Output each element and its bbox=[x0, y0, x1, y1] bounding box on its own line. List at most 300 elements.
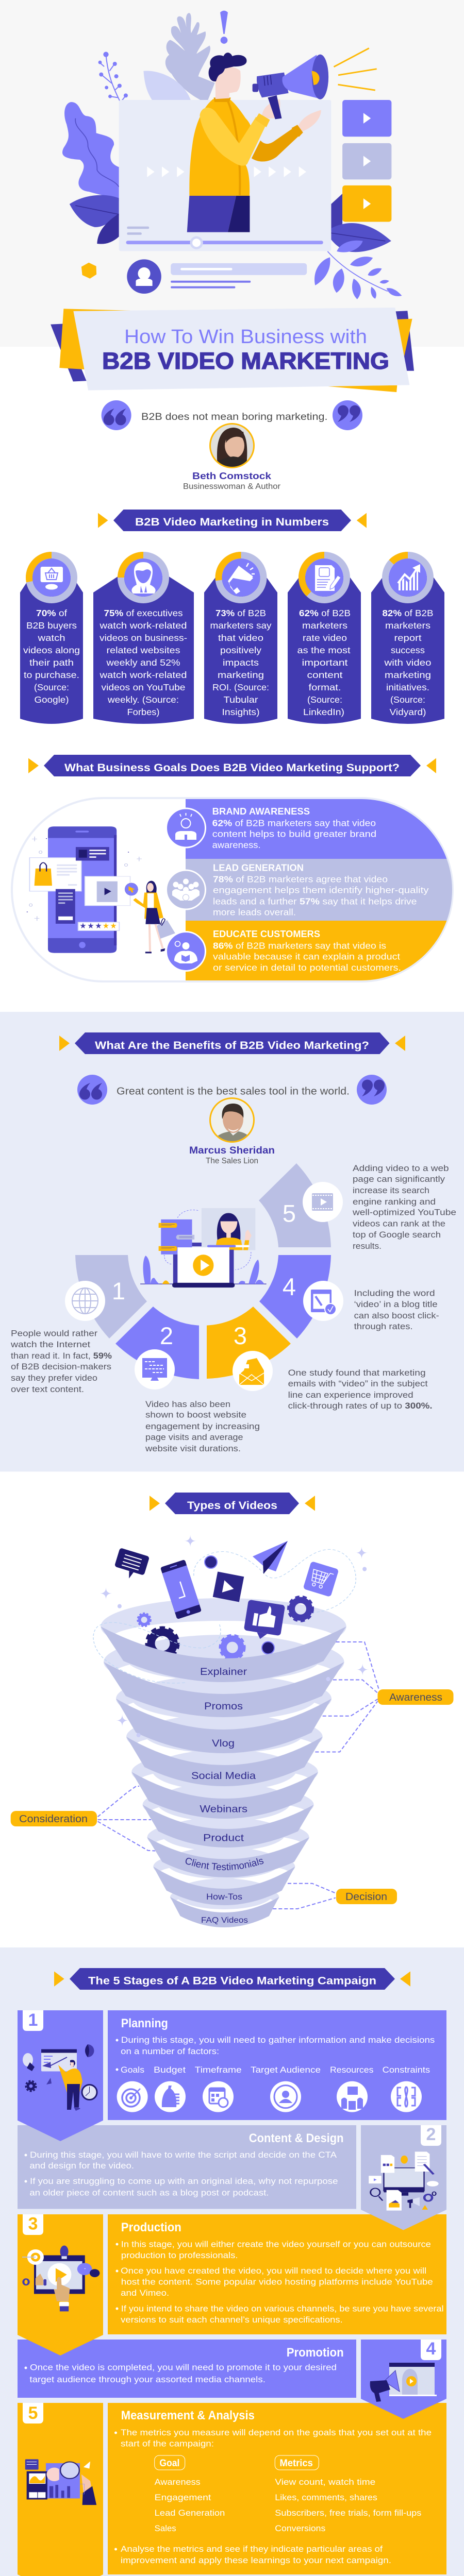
stage 5 boxes bbox=[18, 2403, 446, 2576]
icon: basket monitor bbox=[41, 567, 63, 589]
name: Beth Comstock bbox=[192, 470, 272, 481]
lead generation text bbox=[213, 862, 429, 917]
stage 4 boxes bbox=[18, 2340, 446, 2419]
stage 1 boxes bbox=[18, 2010, 446, 2141]
funnel floating icons bbox=[112, 1541, 339, 1642]
icon: phone bbox=[160, 1560, 202, 1619]
benefit text 3: line can experience improved bbox=[288, 1390, 413, 1400]
segment 2: 2 bbox=[160, 1322, 173, 1349]
stage 3 illustration bbox=[22, 2246, 100, 2311]
layer: Webinars bbox=[131, 1751, 318, 1822]
stat text: ROI. (Source: bbox=[212, 682, 269, 692]
stage 5 illustration bbox=[25, 2459, 96, 2505]
stage 2 bullets: an older piece of content such as a blog post or podcast. bbox=[29, 2188, 269, 2197]
layer: Webinars: Webinars bbox=[200, 1804, 247, 1815]
segment 5: 5 bbox=[283, 1199, 296, 1227]
number tab 4 bbox=[421, 2339, 441, 2360]
goal metric table: Sales bbox=[155, 2524, 176, 2533]
stage 1 bullets: Timeframe bbox=[195, 2065, 242, 2075]
segment 5 bbox=[259, 1163, 331, 1247]
benefit text 3: emails with “video” in the subject bbox=[288, 1379, 428, 1388]
stat text bbox=[210, 608, 272, 717]
stat text: Insights) bbox=[222, 707, 260, 717]
heading: business goals bbox=[28, 755, 436, 776]
stat text: Forbes) bbox=[127, 707, 160, 717]
heading: types of videos: Types of Videos bbox=[187, 1500, 277, 1512]
heading: business goals: What Business Goals Does B2B Video Marketing Support? bbox=[64, 762, 400, 774]
stat text: 82% of B2B bbox=[383, 608, 433, 618]
stage 4 illustration bbox=[370, 2363, 437, 2402]
stat text: videos along bbox=[23, 645, 80, 655]
number tab 3: 3 bbox=[28, 2214, 38, 2234]
stat text: initiatives. bbox=[386, 682, 429, 692]
stage 4 text bbox=[25, 2363, 337, 2384]
stat text: marketers bbox=[302, 620, 347, 631]
title line 2: B2B VIDEO MARKETING bbox=[102, 348, 389, 374]
educate customers text: valuable because it can explain a product bbox=[213, 952, 400, 962]
header background bbox=[0, 0, 464, 347]
panel: business goals bbox=[12, 798, 454, 981]
stage 1 bullets: Budget bbox=[154, 2065, 186, 2075]
segment 4: 4 bbox=[283, 1273, 296, 1300]
icon: play tile bbox=[213, 1571, 244, 1602]
stat column 3 bbox=[204, 555, 277, 724]
plant: feather leaf bbox=[165, 13, 215, 102]
benefit text 1: of B2B decision-makers bbox=[11, 1362, 111, 1371]
stat text: B2B buyers bbox=[26, 620, 77, 631]
stat text: weekly. (Source: bbox=[107, 694, 179, 705]
stat text: with video bbox=[384, 657, 431, 668]
stat text: watch work-related bbox=[99, 620, 187, 631]
stat text: weekly and 52% bbox=[106, 657, 180, 668]
stat text: marketers say bbox=[210, 620, 272, 631]
stage 2 title: Content & Design bbox=[249, 2131, 343, 2145]
video panel bbox=[119, 100, 331, 251]
label: consideration: Consideration bbox=[19, 1814, 88, 1825]
icon: businessman bbox=[131, 562, 156, 594]
heading: benefits bbox=[59, 1032, 405, 1054]
benefit text 1: than read it. In fact, 59% bbox=[11, 1351, 112, 1361]
rating stars: ★ bbox=[95, 922, 102, 930]
heading: campaign stages bbox=[54, 1968, 410, 1990]
sprig with leaves bbox=[314, 251, 402, 299]
benefit text 5: page can significantly bbox=[353, 1174, 445, 1184]
stat column 5 bbox=[371, 555, 444, 724]
icon: goals bbox=[117, 2081, 148, 2112]
metrics pill: Metrics bbox=[279, 2458, 313, 2469]
layer: Explainer bbox=[101, 1598, 346, 1682]
quote marks right bbox=[357, 1075, 387, 1105]
stage 4 title: Promotion bbox=[287, 2346, 344, 2360]
stat text: Tubular bbox=[224, 694, 258, 705]
stat text: important bbox=[302, 657, 348, 668]
funnel bbox=[101, 1598, 346, 1927]
layer: Social Media: Social Media bbox=[191, 1771, 256, 1782]
plant: twig bbox=[98, 52, 128, 101]
benefit text 5: videos can rank at the bbox=[353, 1219, 445, 1229]
panel: benefits bbox=[0, 1012, 464, 1471]
icon: budget bbox=[155, 2081, 186, 2112]
benefit text 4: can also boost click- bbox=[354, 1311, 439, 1320]
portrait: Marcus Sheridan bbox=[209, 1097, 255, 1144]
benefit text 5: Adding video to a web bbox=[353, 1163, 449, 1173]
stat text: that video bbox=[218, 633, 263, 643]
stage 5 bbox=[18, 2403, 446, 2576]
brand awareness text: BRAND AWARENESS bbox=[212, 806, 310, 817]
layer: Explainer: Explainer bbox=[200, 1667, 247, 1677]
stat text: (Source: bbox=[390, 694, 425, 705]
icon: resources bbox=[337, 2081, 368, 2112]
stat text: positively bbox=[220, 645, 261, 655]
segment 3 bbox=[207, 1307, 291, 1379]
brand awareness text: content helps to build greater brand bbox=[212, 829, 376, 839]
stage 1 bullets: Goals bbox=[121, 2065, 144, 2075]
stage 1 illustration bbox=[23, 2044, 97, 2111]
stage 3 bullets bbox=[115, 2240, 443, 2325]
educate customers text: EDUCATE CUSTOMERS bbox=[213, 929, 320, 939]
stage 5 closing: Analyse the metrics and see if they indicate particular areas of bbox=[121, 2545, 383, 2554]
stage 2 bullets: and design for the video. bbox=[29, 2161, 134, 2171]
number tab 2: 2 bbox=[426, 2125, 436, 2144]
panel: campaign stages bbox=[0, 1947, 464, 2576]
stat text: as the most bbox=[297, 645, 351, 655]
lead generation text: 78% of B2B marketers agree that video bbox=[213, 874, 388, 885]
video thumbnails bbox=[342, 100, 391, 222]
portrait: Beth Comstock bbox=[209, 423, 255, 469]
layer: Product: Product bbox=[203, 1833, 244, 1843]
stage 2 bbox=[18, 2125, 446, 2230]
benefit text 2: shown to boost website bbox=[145, 1410, 246, 1420]
goal metric table bbox=[155, 2455, 421, 2533]
stat text bbox=[23, 608, 80, 705]
benefit text 4: ‘video’ in a blog title bbox=[354, 1299, 438, 1309]
layer: Social Media bbox=[126, 1714, 323, 1791]
layer: Promos bbox=[104, 1634, 344, 1720]
icon: cart tile bbox=[303, 1561, 339, 1597]
benefit text 2: page visits and average bbox=[145, 1432, 243, 1442]
benefit text 1: over text content. bbox=[11, 1384, 84, 1394]
dot bbox=[262, 1641, 274, 1654]
goal metric table: Conversions bbox=[275, 2524, 325, 2533]
stage 4 bbox=[18, 2339, 446, 2419]
benefit text 3 bbox=[288, 1368, 433, 1411]
educate customers text: 86% of B2B marketers say that video is bbox=[213, 941, 386, 951]
stat text: marketers bbox=[385, 620, 430, 631]
stage 3 title: Production bbox=[121, 2221, 181, 2234]
stage 3 boxes bbox=[18, 2214, 446, 2355]
stat text bbox=[383, 608, 433, 717]
icon: target audience bbox=[270, 2081, 301, 2112]
stage 1 bbox=[18, 2010, 446, 2141]
number tab 2 bbox=[421, 2125, 441, 2146]
stage 5 closing: improvement and apply these learnings to your next campaign. bbox=[121, 2556, 391, 2565]
brand awareness text bbox=[212, 806, 376, 850]
segment 2 bbox=[115, 1307, 199, 1379]
stage 4 text: target audience through your assorted media channels. bbox=[29, 2375, 266, 2384]
heading: numbers: B2B Video Marketing in Numbers bbox=[135, 516, 329, 528]
icon: chat bubble bbox=[112, 1548, 150, 1582]
stat text: content bbox=[307, 670, 343, 680]
label: decision bbox=[336, 1889, 397, 1904]
stat column 2 bbox=[93, 555, 194, 724]
heading: benefits: What Are the Benefits of B2B Video Marketing? bbox=[95, 1040, 369, 1052]
stage 5 closing bbox=[114, 2545, 391, 2565]
icon: growth chart bbox=[398, 564, 420, 590]
layer: FAQ Videos bbox=[170, 1885, 279, 1927]
educate customers text: or service in detail to potential customers. bbox=[213, 962, 401, 973]
lead generation text: engagement helps them identify higher-quality bbox=[213, 885, 429, 895]
brand awareness text: 62% of B2B marketers say that video bbox=[212, 818, 376, 828]
stat text: related websites bbox=[106, 645, 180, 655]
icon: educate customers bbox=[166, 931, 205, 971]
goal pill bbox=[155, 2455, 185, 2470]
gear: purple center bbox=[221, 1636, 244, 1659]
icon: document and pencil bbox=[315, 565, 341, 591]
metrics pill bbox=[275, 2455, 319, 2470]
stage 5 title: Measurement & Analysis bbox=[121, 2409, 255, 2422]
gear: dark right bbox=[289, 1597, 312, 1621]
stat text bbox=[99, 608, 187, 717]
person with megaphone bbox=[187, 53, 321, 232]
stat text: to purchase. bbox=[24, 670, 79, 680]
segment 1 bbox=[75, 1255, 147, 1338]
layer: Product bbox=[143, 1785, 314, 1851]
profile row bbox=[127, 259, 307, 294]
stage 3 bullets: and Vimeo. bbox=[121, 2289, 169, 2298]
stage 2 bullets: If you are struggling to come up with an original idea, why not repurpose bbox=[30, 2177, 338, 2186]
title line 1: How To Win Business with bbox=[124, 326, 367, 348]
stat text: watch bbox=[37, 633, 65, 643]
stat text: watch work-related bbox=[99, 670, 187, 680]
layer: Promos: Promos bbox=[204, 1701, 243, 1712]
stage 2 bullets: During this stage, you will have to write the script and decide on the CTA bbox=[30, 2150, 337, 2160]
benefit text 5 bbox=[352, 1163, 456, 1251]
banner backing shapes bbox=[51, 308, 414, 392]
stat text: Vidyard) bbox=[390, 707, 426, 717]
benefit text 3: click-through rates of up to 300%. bbox=[288, 1401, 433, 1411]
stage 3 bullets: Once you have created the video, you will need to decide where you will bbox=[121, 2266, 426, 2276]
goal metric table: View count, watch time bbox=[275, 2478, 375, 2487]
stage 1 bullets: Target Audience bbox=[251, 2065, 321, 2075]
stat text: format. bbox=[308, 682, 341, 692]
icon: video film bbox=[303, 1182, 343, 1222]
central illustration: laptop and presenter bbox=[140, 1208, 267, 1287]
name: Marcus Sheridan bbox=[189, 1145, 275, 1156]
quote text: B2B does not mean boring marketing. bbox=[141, 412, 328, 422]
quote: Beth Comstock bbox=[102, 400, 362, 491]
benefit text 1: People would rather bbox=[11, 1329, 97, 1338]
heading: numbers bbox=[98, 510, 367, 531]
segment 3: 3 bbox=[234, 1322, 247, 1349]
stage 3 bullets: In this stage, you will either create the video yourself or you can outsource bbox=[121, 2240, 431, 2249]
benefit text 3: One study found that marketing bbox=[288, 1368, 426, 1378]
benefit text 2: engagement by increasing bbox=[145, 1421, 260, 1431]
rating stars: ★ bbox=[103, 922, 109, 930]
progress slider bbox=[126, 227, 323, 249]
stat text: impacts bbox=[223, 657, 259, 668]
stat text: videos on YouTube bbox=[101, 682, 186, 692]
rating stars: ★ bbox=[110, 922, 117, 930]
icon: monitor code bbox=[135, 1349, 175, 1389]
stage 1 bullets: Constraints bbox=[383, 2065, 430, 2075]
stage 4 text: Once the video is completed, you will need to promote it to your desired bbox=[30, 2363, 337, 2372]
left leaves bbox=[62, 102, 119, 244]
stage 2 illustration bbox=[369, 2151, 439, 2211]
stage 1 bullets: Resources bbox=[330, 2065, 373, 2075]
stat text bbox=[297, 608, 351, 717]
role: The Sales Lion bbox=[206, 1157, 258, 1165]
stage 3 bbox=[18, 2214, 446, 2355]
label: consideration bbox=[11, 1811, 97, 1826]
stage 3 bullets: host the content. Some popular video hosting platforms include YouTube bbox=[121, 2278, 433, 2287]
icon: paper plane bbox=[253, 1541, 288, 1574]
layer: Client Testimonials: Client Testimonials bbox=[186, 1858, 264, 1870]
ring bbox=[302, 555, 346, 600]
stage 5 intro: The metrics you measure will depend on the goals that you set out at the bbox=[121, 2428, 432, 2437]
stage 5 intro bbox=[114, 2428, 432, 2449]
ring bbox=[386, 555, 430, 600]
layer: Vlog bbox=[116, 1674, 332, 1753]
stage 2 bullets bbox=[25, 2150, 338, 2197]
quote marks left bbox=[77, 1075, 107, 1105]
benefit text 5: well-optimized YouTube bbox=[352, 1208, 456, 1217]
ring bbox=[121, 555, 166, 600]
stat text: LinkedIn) bbox=[303, 707, 344, 717]
stat text: report bbox=[394, 633, 422, 643]
benefit text 5: top of Google search bbox=[353, 1230, 441, 1240]
layer: FAQ Videos: FAQ Videos bbox=[201, 1916, 248, 1925]
benefit text 2: website visit durations. bbox=[145, 1444, 241, 1453]
stat text: 70% of bbox=[36, 608, 67, 618]
stat text: marketing bbox=[385, 670, 431, 680]
colored bands bbox=[186, 799, 454, 980]
benefit text 1 bbox=[10, 1329, 112, 1394]
stat text: (Source: bbox=[307, 694, 342, 705]
goal metric table: Awareness bbox=[155, 2478, 201, 2487]
layer: How-Tos: How-Tos bbox=[206, 1892, 242, 1902]
number tab 4: 4 bbox=[426, 2339, 436, 2359]
benefit text 5: increase its search bbox=[353, 1185, 429, 1195]
stat text: videos on business- bbox=[100, 633, 187, 643]
number tab 1: 1 bbox=[28, 2010, 38, 2030]
stage 2 boxes bbox=[18, 2125, 446, 2230]
gear: dark left bbox=[147, 1628, 178, 1659]
stage 1 bullets: on a number of factors: bbox=[121, 2047, 219, 2056]
stage 3 bullets: production to professionals. bbox=[121, 2251, 238, 2260]
segment 4 bbox=[259, 1255, 331, 1338]
goal metric table: Lead Generation bbox=[155, 2509, 225, 2518]
stage 3 bullets: versions to suit each channel’s unique specifications. bbox=[121, 2315, 343, 2325]
right leaves bbox=[331, 194, 391, 252]
label: decision: Decision bbox=[345, 1891, 387, 1903]
icon: lead generation bbox=[166, 870, 205, 909]
rating stars: ★ bbox=[87, 922, 94, 930]
stage 1 bullets: During this stage, you will need to gather information and make decisions bbox=[121, 2036, 435, 2045]
heading: campaign stages: The 5 Stages of A B2B Video Marketing Campaign bbox=[88, 1975, 376, 1987]
dashed flight paths bbox=[93, 1549, 356, 1683]
number tab 1 bbox=[23, 2010, 43, 2031]
stat text: their path bbox=[29, 657, 74, 668]
icon: browser with check bbox=[303, 1281, 343, 1321]
icon: thumbs up bbox=[243, 1600, 285, 1642]
stat column 4 bbox=[288, 555, 361, 724]
goal metric table: Subscribers, free trials, form fill-ups bbox=[275, 2509, 421, 2518]
pill outline bbox=[12, 798, 453, 981]
icon: constraints bbox=[391, 2081, 422, 2112]
stage 1 bullets bbox=[115, 2036, 435, 2075]
benefit text 5: engine ranking and bbox=[353, 1197, 436, 1207]
goal metric table: Likes, comments, shares bbox=[275, 2493, 377, 2502]
benefit text 4: through rates. bbox=[354, 1321, 413, 1331]
gear: small bbox=[138, 1614, 151, 1626]
number tab 5 bbox=[23, 2403, 43, 2424]
number tab 3 bbox=[23, 2214, 43, 2235]
stat text: Google) bbox=[34, 694, 69, 705]
rating stars bbox=[79, 922, 117, 930]
benefit text 1: watch the Internet bbox=[10, 1340, 90, 1349]
layer: Vlog: Vlog bbox=[212, 1738, 235, 1749]
quote text: Great content is the best sales tool in the world. bbox=[117, 1086, 350, 1097]
ring bbox=[219, 555, 263, 600]
educate customers text bbox=[213, 929, 401, 973]
benefit text 4: Including the word bbox=[354, 1289, 435, 1298]
funnel stage lines bbox=[98, 1642, 379, 1909]
brand awareness text: awareness. bbox=[212, 840, 261, 850]
lead generation text: leads and a further 57% say that it helps drive bbox=[213, 896, 417, 906]
goal metric table: Engagement bbox=[155, 2493, 211, 2502]
icon: email megaphone bbox=[233, 1351, 273, 1391]
play arrows bbox=[147, 166, 306, 177]
exclamation mark bbox=[220, 11, 228, 44]
sparkles and dots bbox=[100, 1535, 369, 1737]
layer: How-Tos bbox=[153, 1850, 295, 1909]
icon: globe bbox=[65, 1281, 105, 1321]
stat text: success bbox=[391, 645, 425, 655]
layer: Client Testimonials bbox=[147, 1828, 309, 1878]
title banner bbox=[51, 308, 414, 392]
benefit text 2: Video has also been bbox=[145, 1399, 230, 1409]
role: Businesswoman & Author bbox=[183, 482, 280, 491]
stat text: 75% of executives bbox=[104, 608, 183, 618]
stat text: 73% of B2B bbox=[216, 608, 266, 618]
hexagon bbox=[81, 263, 96, 279]
lead generation text: more leads overall. bbox=[213, 907, 296, 917]
stage 5 intro: start of the campaign: bbox=[121, 2439, 214, 2449]
number tab 5: 5 bbox=[28, 2403, 38, 2423]
benefit text 2 bbox=[145, 1399, 260, 1453]
stage 1 title: Planning bbox=[121, 2016, 168, 2030]
plant: pale leaf bbox=[143, 71, 191, 100]
label: awareness: Awareness bbox=[389, 1692, 442, 1703]
illustration: phone and shopper bbox=[27, 826, 175, 953]
stat column 1 bbox=[20, 555, 83, 724]
rating stars: ★ bbox=[79, 922, 87, 930]
benefit text 4 bbox=[354, 1289, 439, 1331]
heading: types of videos bbox=[150, 1493, 315, 1514]
quote marks right bbox=[333, 400, 362, 430]
stat text: rate video bbox=[303, 633, 347, 643]
icon: megaphone bbox=[228, 563, 255, 594]
dot bbox=[205, 1556, 217, 1568]
sound lines bbox=[334, 48, 377, 90]
quote marks left bbox=[102, 400, 131, 430]
megaphone bbox=[253, 55, 328, 119]
label: awareness bbox=[377, 1689, 454, 1705]
goal pill: Goal bbox=[159, 2458, 179, 2469]
stat text: 62% of B2B bbox=[299, 608, 351, 618]
stat text: marketing bbox=[218, 670, 264, 680]
hero illustration bbox=[62, 11, 402, 299]
